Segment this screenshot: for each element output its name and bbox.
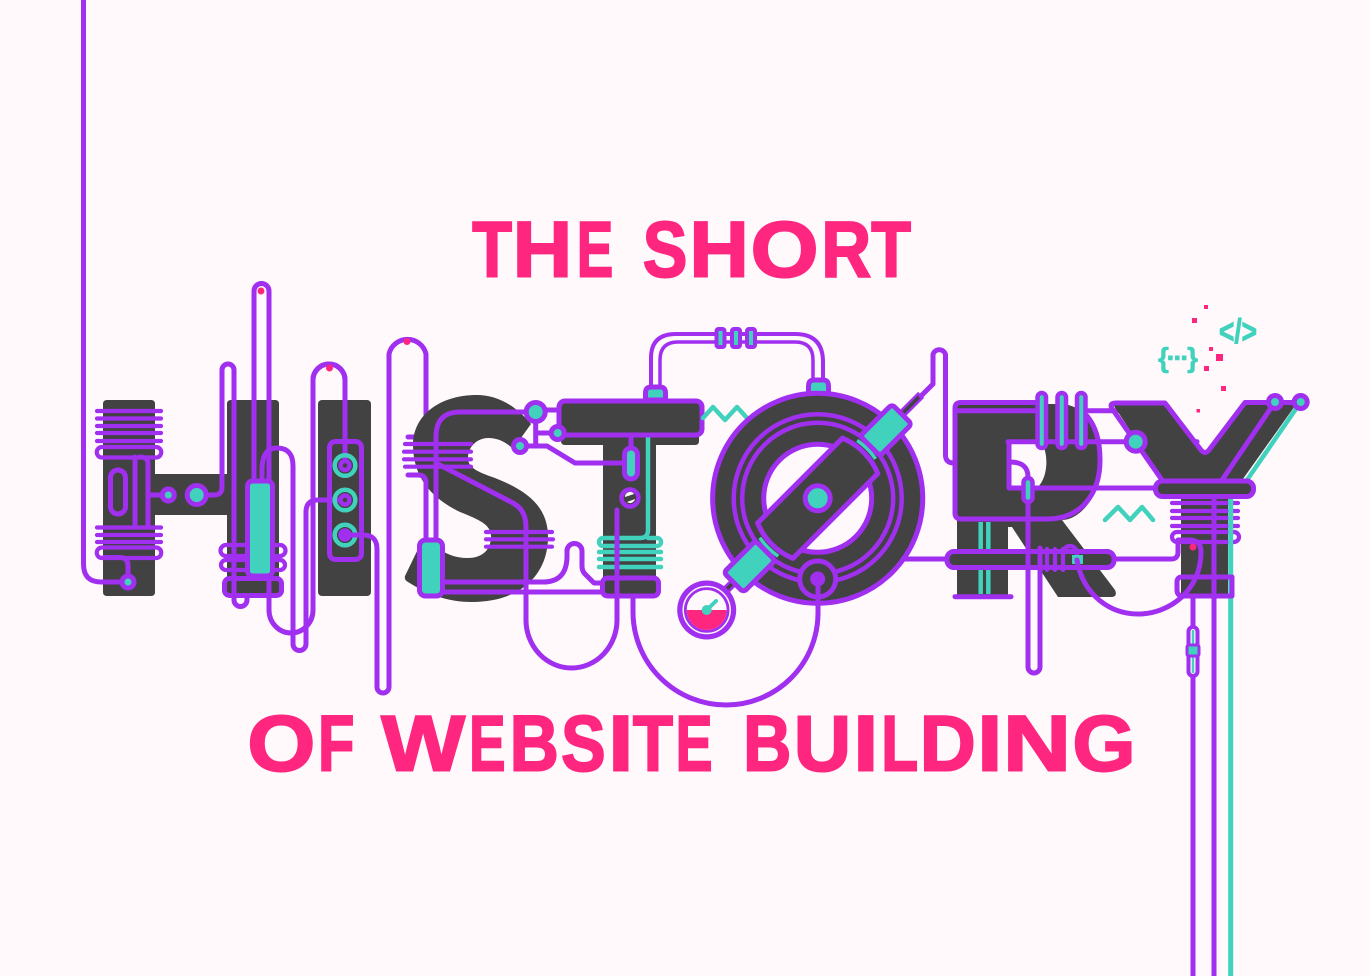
teal zigzag near R [1105,507,1153,520]
title: the short: T [472,205,512,294]
R-Y node [1126,432,1145,451]
letter I [313,338,426,693]
pink dot [258,288,264,294]
R vertical tube [1028,502,1040,673]
R teal stripes [981,522,988,594]
gauge needle [707,601,716,610]
big under-loop wire [633,578,818,705]
title: of website building: O [247,699,315,788]
stub left [646,387,666,400]
title: of website building: F [318,699,354,788]
title: of website building: I [853,699,878,788]
gauge fill [687,610,727,630]
title: of website building: E [676,699,712,788]
letter T [514,401,818,705]
R bar coil [1040,546,1077,570]
Y bottom bracket [1177,577,1232,596]
lower teal block [724,541,775,592]
title: of website building: B [510,699,559,788]
icon: braces: {···} [1158,342,1198,373]
swoop wire [1077,540,1201,614]
T capsule [520,410,638,479]
pink dots [326,338,411,372]
T bottom bracket [602,578,658,596]
H crossbar nodes [162,364,247,606]
title: of website building: N [1003,699,1071,788]
letter R [947,393,1197,673]
O rings [734,414,902,582]
title: of website building: E [469,699,506,788]
bottom port [800,561,836,615]
title: of website building: L [881,699,918,788]
title: of website building: I [977,699,1002,788]
title: the short: O [751,205,819,294]
Y collar [1156,481,1254,496]
title: of website building: B [743,699,791,788]
title: of website building: G [1072,699,1136,788]
S teal cartridge [420,540,442,596]
title: the short: T [871,205,911,294]
letter Y [1077,396,1307,976]
pink dot [1190,544,1196,550]
inline fuse [1187,627,1199,676]
title: of website building: T [633,699,673,788]
Y purple drop lines [1193,498,1214,976]
title: of website building: I [608,699,633,788]
R outline [955,402,1197,519]
O to R wire [903,556,946,562]
R bar teal block [1072,555,1083,564]
H vertical wires [135,457,168,526]
loop wire [262,448,345,650]
title: the short: S [643,205,687,294]
title: the short: H [513,205,572,294]
H foot bracket [224,578,282,596]
pressure gauge [677,580,736,640]
H right coil loops [221,545,286,570]
S-T junction nodes [514,402,564,452]
long tube [345,339,426,693]
Y end nodes [1268,396,1307,408]
T top bar [559,401,702,435]
center hub [805,486,830,511]
stub right [808,380,828,394]
Y outline [1111,402,1300,480]
needle [720,394,922,596]
Y coil [1172,503,1239,542]
slash band [754,435,881,562]
upper right tube [921,350,954,463]
icon: code tag: </> [1219,313,1257,351]
letter O with slash [705,350,954,615]
teal zigzag near T [703,407,747,420]
R top coil [1038,393,1086,448]
I bracket [330,442,362,560]
I wires redrawn above [313,364,345,500]
pink particles [1192,305,1226,412]
I terminals [335,455,355,545]
letter I stem wiring [221,284,345,650]
T vertical pass wire [614,510,620,620]
return wire from I [269,364,345,633]
R base line [955,594,1011,599]
title: of website building: U [794,699,851,788]
Y teal drop line [1228,499,1233,976]
letter H [84,0,279,606]
R capsule [1024,478,1032,502]
T gauge dial [622,490,638,506]
title: of website building: S [561,699,606,788]
tall tube [254,284,269,480]
teal cartridge [248,481,272,576]
S lower wires [444,544,601,592]
S wires [408,412,630,668]
title: of website building: W [381,699,466,788]
title: of website building: D [920,699,976,788]
H capsule [110,470,126,514]
letter S [404,395,630,668]
teal coil [599,435,661,567]
S upper coil [404,444,471,467]
Y teal edge [1247,403,1300,480]
S lower coil [486,532,553,547]
title: the short: H [690,205,749,294]
pipe connector [716,329,755,347]
top double pipe [646,329,828,400]
H entry wire [84,0,128,582]
R bar [947,552,1114,568]
H foot node [122,576,134,588]
slash assembly [705,378,938,611]
upper teal block [860,404,912,456]
title: the short: R [821,205,871,294]
title: the short: E [577,205,613,294]
H top coil [97,411,161,458]
teal ring segments [759,440,876,557]
H lower coil [97,528,161,558]
